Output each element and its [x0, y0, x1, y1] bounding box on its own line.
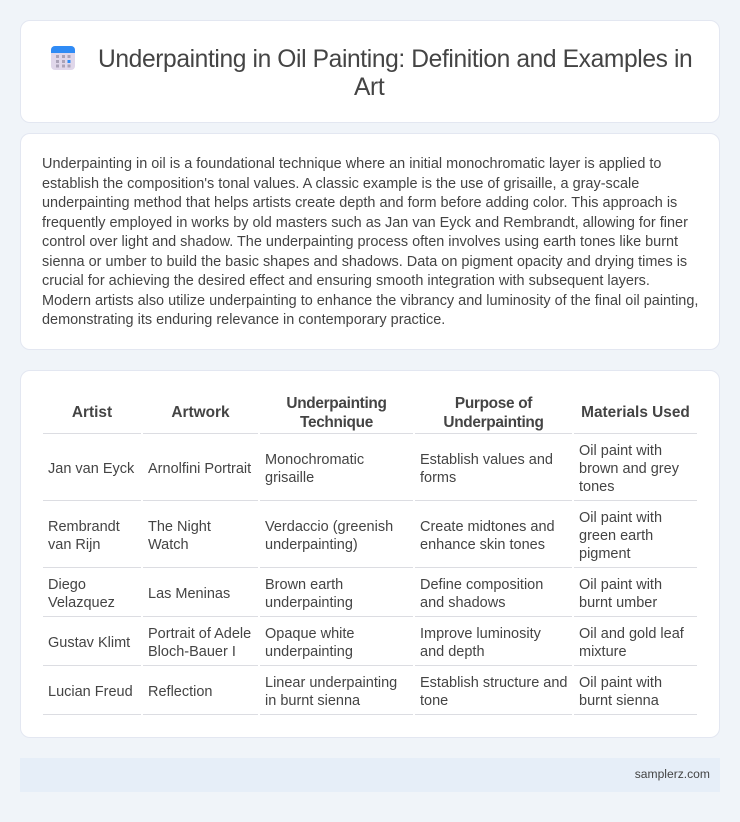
table header row: Underpainting: [443, 414, 544, 431]
table row: Rembrandt van Rijn: Verdaccio (greenish: [265, 519, 393, 535]
table row: Gustav Klimt: Oil and gold leaf: [579, 626, 684, 642]
table row: Diego Velazquez: Velazquez: [48, 595, 115, 611]
text block: description: demonstrating its enduring relevance in contemporary practice.: [42, 312, 445, 328]
table row: Rembrandt van Rijn: The Night: [148, 519, 211, 535]
table row: Diego Velazquez: Diego: [48, 577, 86, 593]
table row: Rembrandt van Rijn: Rembrandt: [48, 519, 120, 535]
table row: Gustav Klimt: [48, 626, 684, 660]
table row: Jan van Eyck: [48, 443, 679, 495]
table row: Diego Velazquez: Define composition: [420, 577, 543, 593]
table row: Jan van Eyck: Jan van Eyck: [48, 461, 134, 477]
table row: Rembrandt van Rijn: underpainting): [265, 537, 358, 553]
text block: description: sienna or umber to build the basic shapes and shadows. Data on pigment opacity and drying times is: [42, 254, 687, 270]
table row: Jan van Eyck: Monochromatic: [265, 452, 364, 468]
footer bar: [20, 758, 720, 792]
title: Underpainting in Oil Painting: Definition and Examples in: [98, 46, 692, 73]
table row: Diego Velazquez: burnt umber: [579, 595, 657, 611]
table row: Rembrandt van Rijn: van Rijn: [48, 537, 100, 553]
table header row: Underpainting: [286, 395, 387, 412]
table row: Lucian Freud: burnt sienna: [579, 693, 659, 709]
table header row: Materials Used: [581, 404, 690, 421]
table row: Diego Velazquez: and shadows: [420, 595, 505, 611]
table row: Gustav Klimt: Portrait of Adele: [148, 626, 251, 642]
title: Art: [354, 74, 384, 101]
table row: Diego Velazquez: [48, 577, 662, 611]
table row: Jan van Eyck: Arnolfini Portrait: [148, 461, 251, 477]
table row: Rembrandt van Rijn: Oil paint with: [579, 510, 662, 526]
table row: Gustav Klimt: underpainting: [265, 644, 353, 660]
text block: description: [42, 156, 698, 328]
table row: Lucian Freud: Lucian Freud: [48, 684, 133, 700]
table row: Lucian Freud: Linear underpainting: [265, 675, 397, 691]
table header row: Technique: [300, 414, 373, 431]
table row: Diego Velazquez: Las Meninas: [148, 586, 230, 602]
table row: Jan van Eyck: tones: [579, 479, 614, 495]
table header row: [72, 395, 690, 431]
table row: Gustav Klimt: mixture: [579, 644, 627, 660]
panel: title card: [20, 20, 720, 123]
text block: description: frequently employed in works by old masters such as Jan van Eyck and Rembrandt, allowing for finer: [42, 214, 688, 230]
table row: Lucian Freud: Oil paint with: [579, 675, 662, 691]
icon: calendar grid: [51, 46, 75, 70]
panel: table card: [20, 370, 720, 738]
table row: Rembrandt van Rijn: [48, 510, 662, 562]
table header row: Purpose of: [455, 395, 532, 412]
title: [98, 46, 692, 101]
table: artists and underpainting techniques: [43, 395, 697, 715]
text block: description: establish the composition's tonal values. A classic example is the use of grisaille, a gray-scale: [42, 176, 639, 192]
table row: Gustav Klimt: Improve luminosity: [420, 626, 541, 642]
text block: description: control over light and shadow. The underpainting process often involves using earth tones like burnt: [42, 234, 678, 250]
table header row: Artist: [72, 404, 112, 421]
text block: description: underpainting method that helps artists create depth and form before adding color. This approach is: [42, 195, 677, 211]
text block: description: crucial for achieving the desired effect and ensuring smooth integration with subsequent layers.: [42, 273, 650, 289]
text block: description: Modern artists also utilize underpainting to enhance the vibrancy and luminosity of the final oil painting,: [42, 292, 698, 308]
table row: Gustav Klimt: Bloch-Bauer I: [148, 644, 236, 660]
table row: Lucian Freud: tone: [420, 693, 448, 709]
table row: Lucian Freud: in burnt sienna: [265, 693, 360, 709]
table row: Diego Velazquez: Brown earth: [265, 577, 343, 593]
table row: Jan van Eyck: Establish values and: [420, 452, 553, 468]
table row: Lucian Freud: Reflection: [148, 684, 212, 700]
table row: Jan van Eyck: grisaille: [265, 470, 314, 486]
table row: Rembrandt van Rijn: Create midtones and: [420, 519, 555, 535]
table row: Jan van Eyck: Oil paint with: [579, 443, 662, 459]
table row: Jan van Eyck: brown and grey: [579, 461, 679, 477]
table row: Rembrandt van Rijn: Watch: [148, 537, 189, 553]
table row: Gustav Klimt: Gustav Klimt: [48, 635, 130, 651]
table row: Diego Velazquez: underpainting: [265, 595, 353, 611]
table row: Rembrandt van Rijn: pigment: [579, 546, 631, 562]
table header row: Artwork: [171, 404, 230, 421]
table row: Lucian Freud: [48, 675, 662, 709]
text block: description: Underpainting in oil is a foundational technique where an initial monochromatic layer is applied to: [42, 156, 661, 172]
table row: Rembrandt van Rijn: green earth: [579, 528, 653, 544]
table row: Rembrandt van Rijn: enhance skin tones: [420, 537, 545, 553]
table row: Lucian Freud: Establish structure and: [420, 675, 568, 691]
table row: Gustav Klimt: and depth: [420, 644, 485, 660]
table row: Diego Velazquez: Oil paint with: [579, 577, 662, 593]
footer source text: samplerz.com: [635, 767, 710, 781]
table row: Gustav Klimt: Opaque white: [265, 626, 354, 642]
table row: Jan van Eyck: forms: [420, 470, 456, 486]
panel: description card: [20, 133, 720, 350]
